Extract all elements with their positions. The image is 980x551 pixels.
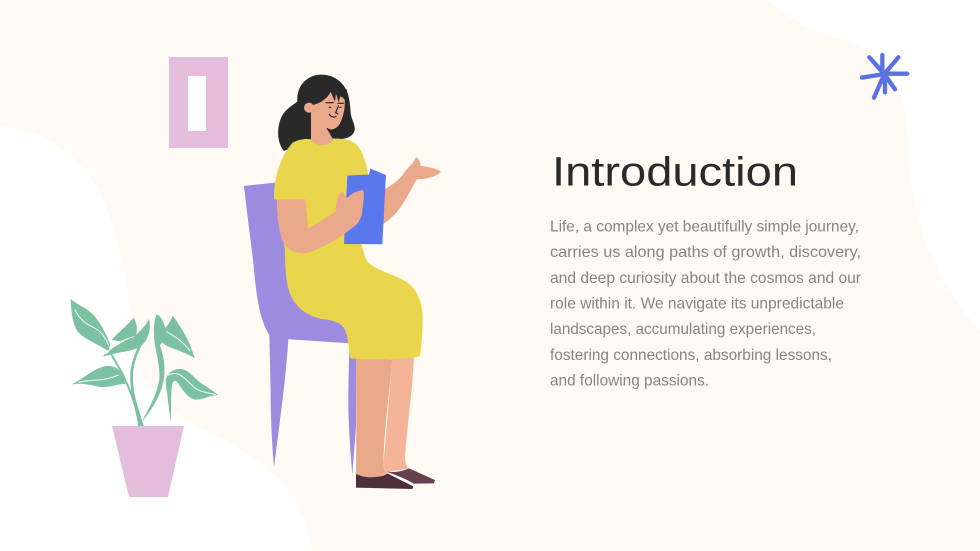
- facial features: [326, 103, 343, 130]
- front leg: [356, 357, 392, 478]
- body paragraph: and following passions.: [550, 372, 709, 390]
- illustration: potted plant: [71, 299, 218, 497]
- plant pot: [112, 426, 184, 497]
- left leaves and stems: [71, 299, 150, 428]
- body paragraph: and deep curiosity about the cosmos and our: [550, 270, 862, 287]
- chair: [244, 183, 356, 475]
- icon: blue asterisk: [862, 55, 907, 98]
- back leg: [383, 356, 414, 472]
- body paragraph: fostering connections, absorbing lessons,: [550, 347, 832, 364]
- front shoe: [356, 473, 413, 489]
- right leaves and stems: [142, 314, 218, 422]
- body paragraph: role within it. We navigate its unpredictable: [550, 296, 844, 312]
- dress: [274, 139, 423, 360]
- body paragraph: landscapes, accumulating experiences,: [550, 321, 816, 338]
- wall frame: [169, 57, 228, 148]
- far arm and hand: [383, 157, 441, 224]
- illustration: seated woman on chair: [244, 75, 441, 489]
- near arm and hand: [277, 190, 364, 253]
- legs and shoes: [356, 356, 435, 489]
- fringe: [310, 80, 347, 105]
- body paragraph: [550, 218, 862, 390]
- title: Introduction: [552, 148, 798, 194]
- blue folder: [344, 169, 386, 244]
- body paragraph: Life, a complex yet beautifully simple journey,: [550, 218, 859, 236]
- neck, face and ear: [304, 80, 347, 152]
- hair: [278, 75, 355, 151]
- body paragraph: carries us along paths of growth, discovery,: [550, 244, 861, 261]
- back shoe: [387, 468, 435, 484]
